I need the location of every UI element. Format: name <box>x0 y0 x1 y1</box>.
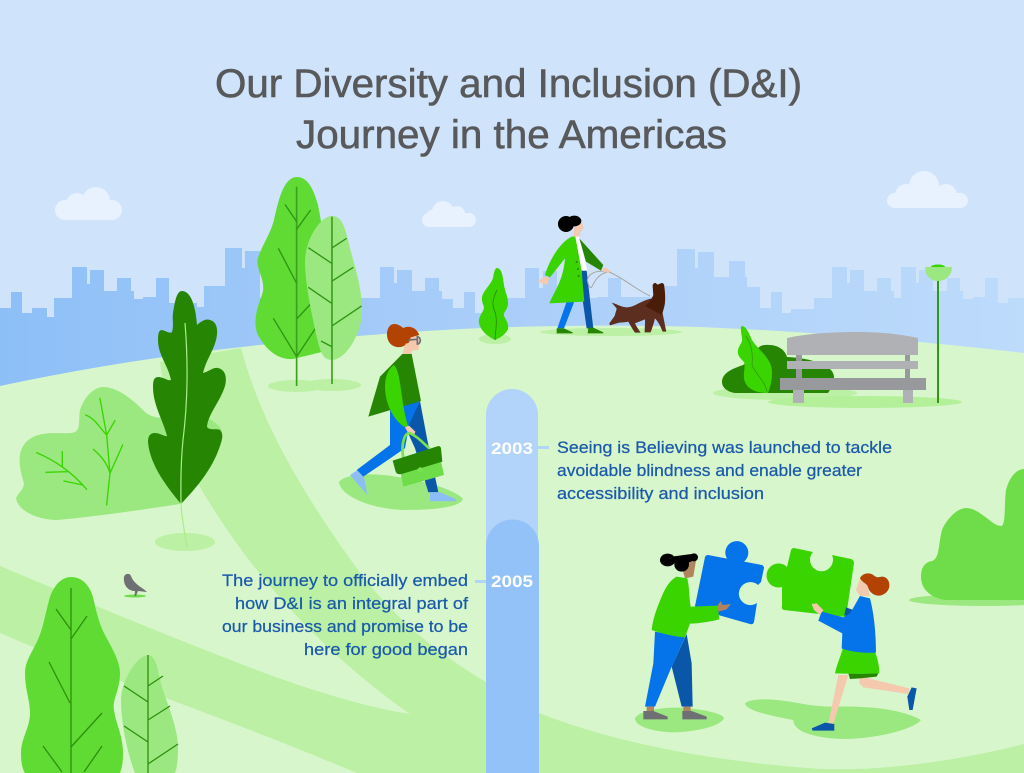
street lamp <box>925 264 952 403</box>
text: 2005 milestone <box>222 571 468 659</box>
year 2003: 2003 <box>491 439 533 458</box>
blue puzzle piece <box>695 541 764 624</box>
cloud: centre <box>422 201 476 227</box>
text: 2005 milestone: how D&I is an integral part of <box>235 594 468 613</box>
left woman: front leg <box>645 632 685 707</box>
right woman: hair <box>860 573 889 596</box>
right woman shadow <box>745 699 921 739</box>
left woman: shoes <box>643 711 707 719</box>
face and neck <box>402 335 420 357</box>
oak vein and stem <box>181 323 187 547</box>
tree: large bright <box>255 177 330 386</box>
bright leaf <box>738 326 772 393</box>
coat buttons <box>576 261 580 277</box>
glasses <box>408 337 420 344</box>
city skyline <box>0 248 1024 400</box>
bench and bush group <box>713 326 962 408</box>
2003 bar <box>486 389 538 773</box>
cloud: right <box>887 171 968 208</box>
timeline <box>475 389 549 773</box>
bench back <box>787 332 918 355</box>
text: 2003 milestone <box>557 438 892 503</box>
park paths <box>0 348 1024 773</box>
bottom-left tree trunk and branches <box>43 588 102 773</box>
tree: bottom-left pale leaf <box>121 655 178 773</box>
dark bush <box>722 345 834 393</box>
left woman: face <box>683 561 696 578</box>
walking woman with bag <box>339 324 463 510</box>
right woman: shoes <box>812 687 917 731</box>
shadow: twin trees <box>268 379 361 392</box>
text: 2003 milestone: Seeing is Believing was launched to tackle <box>557 438 892 457</box>
shadows <box>713 386 857 400</box>
tree: pale leaf <box>305 216 362 384</box>
dark sleeve <box>579 238 603 271</box>
2005 bar <box>486 520 539 773</box>
shadow: right bush <box>909 594 1024 606</box>
right woman: legs <box>828 673 909 724</box>
cape torso <box>368 354 421 417</box>
tree: oak leaf <box>148 291 226 547</box>
clouds <box>55 171 968 227</box>
green puzzle piece <box>767 548 854 617</box>
bench uprights <box>796 355 910 378</box>
left woman shadow <box>635 708 724 732</box>
hair <box>387 324 419 347</box>
shadow: oak leaf <box>155 533 215 551</box>
leash <box>587 271 650 296</box>
dog head <box>645 283 665 315</box>
leaf vein <box>746 336 767 392</box>
right woman: sweater <box>818 596 876 653</box>
text: 2003 milestone: avoidable blindness and enable greater <box>557 461 862 480</box>
hair <box>558 216 581 232</box>
right woman: dark sleeve <box>844 607 853 618</box>
face and neck <box>573 220 584 237</box>
shadow: dog walker <box>540 328 682 336</box>
ground shadow <box>339 474 463 510</box>
bench legs <box>793 390 913 403</box>
text: 2005 milestone: our business and promise to be <box>222 617 468 636</box>
right woman: face <box>856 578 870 596</box>
pale leaf trunk and branches <box>124 655 178 773</box>
back leg <box>582 271 593 328</box>
dog body <box>609 299 666 333</box>
hand <box>405 426 415 436</box>
title: Our Diversity and Inclusion (D&I) <box>215 62 802 106</box>
left woman: sweater <box>652 577 719 637</box>
year 2005: 2005 <box>491 572 533 591</box>
pigeon <box>124 574 147 598</box>
right woman: skirt <box>835 647 879 674</box>
sleeve <box>385 365 408 427</box>
small centre leaf <box>479 268 508 340</box>
title: Journey in the Americas <box>296 113 727 157</box>
left woman: dark leg <box>672 634 693 707</box>
left woman: hand <box>717 601 731 612</box>
puzzle scene <box>635 541 921 739</box>
front leg <box>357 401 420 477</box>
right woman: skirt underside <box>848 673 878 679</box>
shirt <box>575 237 587 271</box>
bench slat <box>787 361 918 369</box>
2003 connector <box>538 446 549 449</box>
text: 2003 milestone: accessibility and inclusion <box>557 484 764 503</box>
woman walking dog <box>537 216 666 333</box>
bush twigs <box>37 398 123 505</box>
tree: bottom-left large <box>21 577 123 773</box>
right woman: hand <box>812 603 823 615</box>
shadow: centre leaf <box>479 334 511 344</box>
back leg <box>407 401 438 492</box>
hands <box>537 268 612 285</box>
bag <box>393 446 444 487</box>
left woman: hair <box>660 553 698 572</box>
coat <box>545 237 584 303</box>
tree trunk and branches <box>273 187 317 386</box>
text: 2005 milestone: The journey to officially embed <box>222 571 468 590</box>
bush: left <box>16 387 222 520</box>
bush: right <box>921 469 1024 600</box>
text: 2005 milestone: here for good began <box>304 640 468 659</box>
bench seat <box>780 378 926 390</box>
centre leaf vein <box>493 290 497 340</box>
hill <box>0 326 1024 773</box>
bag handle <box>403 433 429 458</box>
pale tree trunk and branches <box>308 217 362 384</box>
shoes <box>350 471 456 501</box>
cloud: left <box>55 187 122 220</box>
front leg <box>557 302 574 328</box>
2005 connector <box>475 580 487 583</box>
title <box>215 62 802 157</box>
shoes <box>557 328 603 333</box>
left woman: ankles <box>647 707 691 712</box>
